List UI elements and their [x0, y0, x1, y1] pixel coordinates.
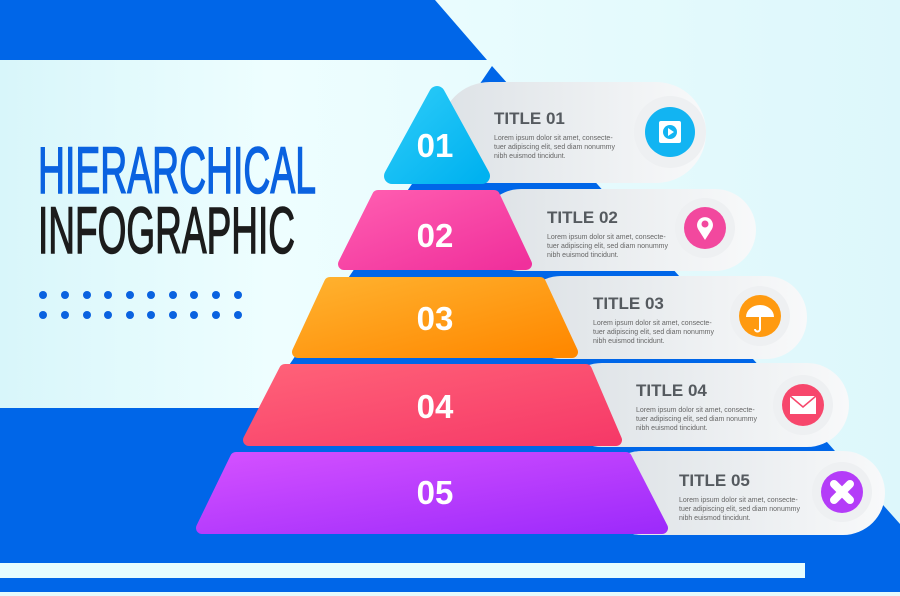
tier 04	[249, 363, 849, 447]
tier 04: tuer adipiscing elit, sed diam nonummy	[636, 416, 758, 423]
icon: play	[634, 96, 706, 168]
tier 01: 01	[417, 127, 453, 164]
tier 04: nibh euismod tincidunt.	[636, 425, 708, 432]
shape 02 trapezoid	[344, 196, 526, 264]
tier 02: TITLE 02	[547, 208, 618, 227]
shape 01 triangle	[392, 94, 482, 176]
tier 05: TITLE 05	[679, 471, 750, 490]
tier 02	[344, 189, 756, 271]
panel 04	[560, 363, 849, 447]
tier 04: 04	[417, 388, 454, 425]
title: INFOGRAPHIC	[38, 193, 295, 267]
shape 04 trapezoid	[249, 370, 616, 440]
tier 03: nibh euismod tincidunt.	[593, 338, 665, 345]
tier 03	[298, 276, 807, 359]
panel 03	[520, 276, 807, 359]
background: top blue band	[0, 0, 487, 60]
tier 02: tuer adipiscing elit, sed diam nonummy	[547, 243, 669, 250]
tier 01	[392, 82, 706, 183]
icon: cross	[812, 462, 872, 522]
tier 01: TITLE 01	[494, 109, 565, 128]
shape 05 trapezoid	[202, 458, 662, 528]
tier 04: TITLE 04	[636, 381, 707, 400]
icon: envelope	[773, 375, 833, 435]
tier 03: tuer adipiscing elit, sed diam nonummy	[593, 329, 715, 336]
tier 05: tuer adipiscing elit, sed diam nonummy	[679, 506, 801, 513]
tier 03: TITLE 03	[593, 294, 664, 313]
tier 05	[202, 451, 885, 535]
tier 05: nibh euismod tincidunt.	[679, 515, 751, 522]
tier 01: Lorem ipsum dolor sit amet, consecte-	[494, 135, 613, 142]
tier 05: 05	[417, 474, 453, 511]
background: light bottom strip	[0, 563, 805, 578]
tier 02: nibh euismod tincidunt.	[547, 252, 619, 259]
tier 03: 03	[417, 300, 453, 337]
tier 01: nibh euismod tincidunt.	[494, 153, 566, 160]
tier 02: 02	[417, 217, 453, 254]
icon: location pin	[675, 198, 735, 258]
title	[38, 133, 316, 267]
tier 04: Lorem ipsum dolor sit amet, consecte-	[636, 407, 755, 414]
tier 01: tuer adipiscing elit, sed diam nonummy	[494, 144, 616, 151]
panel 05	[600, 451, 885, 535]
title: HIERARCHICAL	[38, 133, 316, 207]
panel 01	[440, 82, 706, 183]
icon: umbrella	[730, 286, 790, 346]
tier 05: Lorem ipsum dolor sit amet, consecte-	[679, 497, 798, 504]
shape 03 trapezoid	[298, 283, 572, 352]
tier 02: Lorem ipsum dolor sit amet, consecte-	[547, 234, 666, 241]
decorative dot grid	[39, 291, 242, 319]
panel 02	[480, 189, 756, 271]
tier 03: Lorem ipsum dolor sit amet, consecte-	[593, 320, 712, 327]
